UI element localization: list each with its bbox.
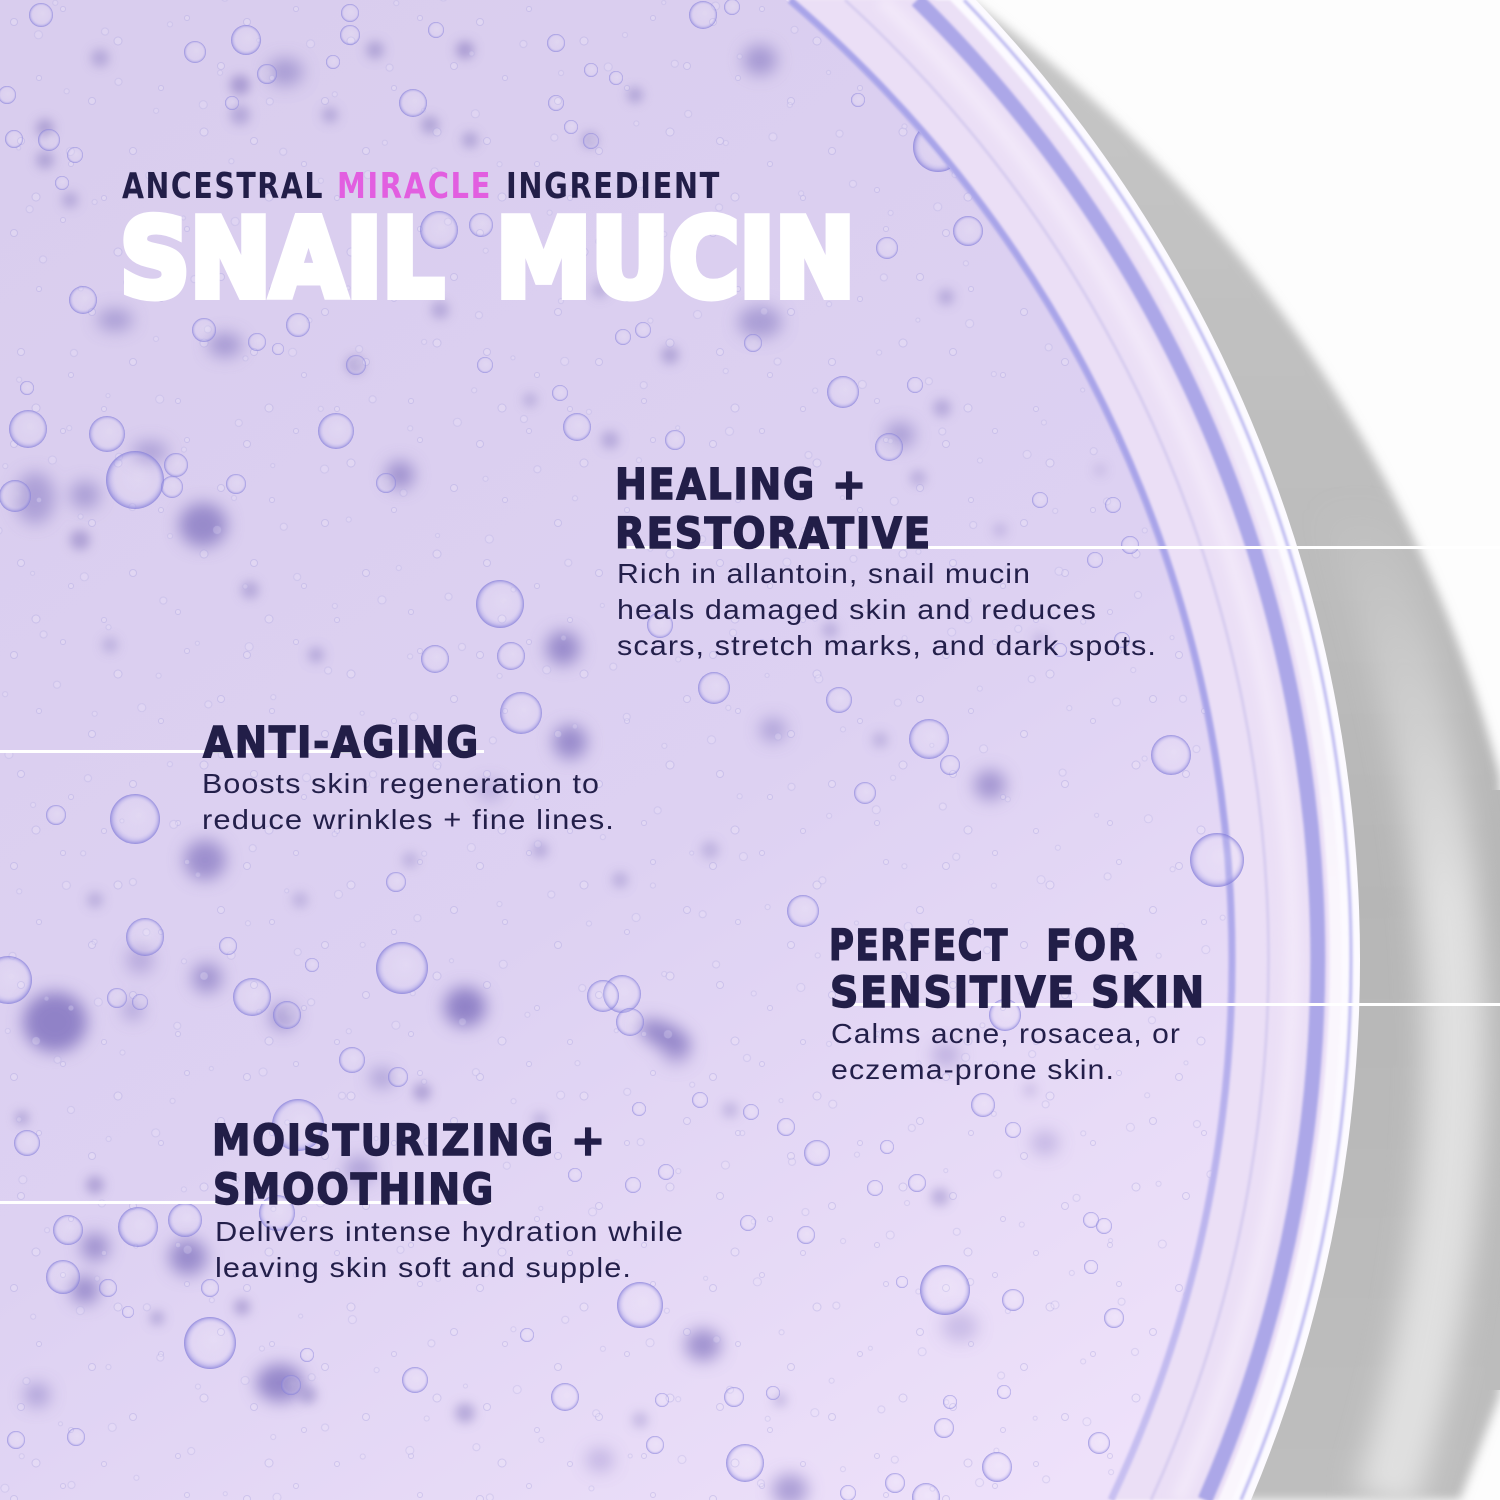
dish shadow [976,0,1500,1500]
body text: Calms acne, rosacea, or [831,1018,1181,1049]
heading [615,460,932,559]
eyebrow: ancestral miracle ingredient [122,166,721,207]
inner blue ring [790,0,1232,1500]
heading: RESTORATIVE [615,509,932,559]
heading [212,1116,607,1215]
heading [829,921,1206,1018]
body text: scars, stretch marks, and dark spots. [617,630,1157,661]
large bubbles [0,0,1139,1500]
body text: heals damaged skin and reduces [617,594,1097,625]
callout: healing + restorative [615,460,1500,661]
heading: + [571,1116,607,1166]
eyebrow: ancestral miracle ingredient: INGREDIENT [506,166,721,207]
heading: ANTI-AGING [203,718,480,768]
body text [202,768,615,835]
body text: Rich in allantoin, snail mucin [617,558,1031,589]
callout: anti-aging [0,718,615,835]
body text: eczema-prone skin. [831,1054,1115,1085]
title block [120,166,855,322]
bubbles on the ring [1151,735,1244,887]
heading: SKIN [1091,968,1206,1018]
heading: FOR [1046,921,1139,971]
heading: HEALING [615,460,816,510]
body text: reduce wrinkles + fine lines. [202,804,615,835]
eyebrow: ancestral miracle ingredient: MIRACLE [337,166,492,207]
callout: perfect for sensitive skin [829,921,1500,1085]
heading: + [832,460,868,510]
main title: snail mucin [120,197,855,322]
heading: PERFECT [829,921,1009,971]
tiny bubbles [10,6,1207,1500]
heading: SENSITIVE [830,968,1076,1018]
body text: Boosts skin regeneration to [202,768,600,799]
callout: moisturizing + smoothing [0,1116,684,1283]
body text: Delivers intense hydration while [215,1216,684,1247]
body text: leaving skin soft and supple. [215,1252,632,1283]
body text [215,1216,684,1283]
body text [831,1018,1181,1085]
heading: SMOOTHING [213,1165,495,1215]
main title: snail mucin: MUCIN [496,197,855,322]
heading: MOISTURIZING [212,1116,555,1166]
eyebrow: ancestral miracle ingredient: ANCESTRAL [122,166,324,207]
body text [617,558,1157,661]
main title: snail mucin: SNAIL [120,197,444,322]
